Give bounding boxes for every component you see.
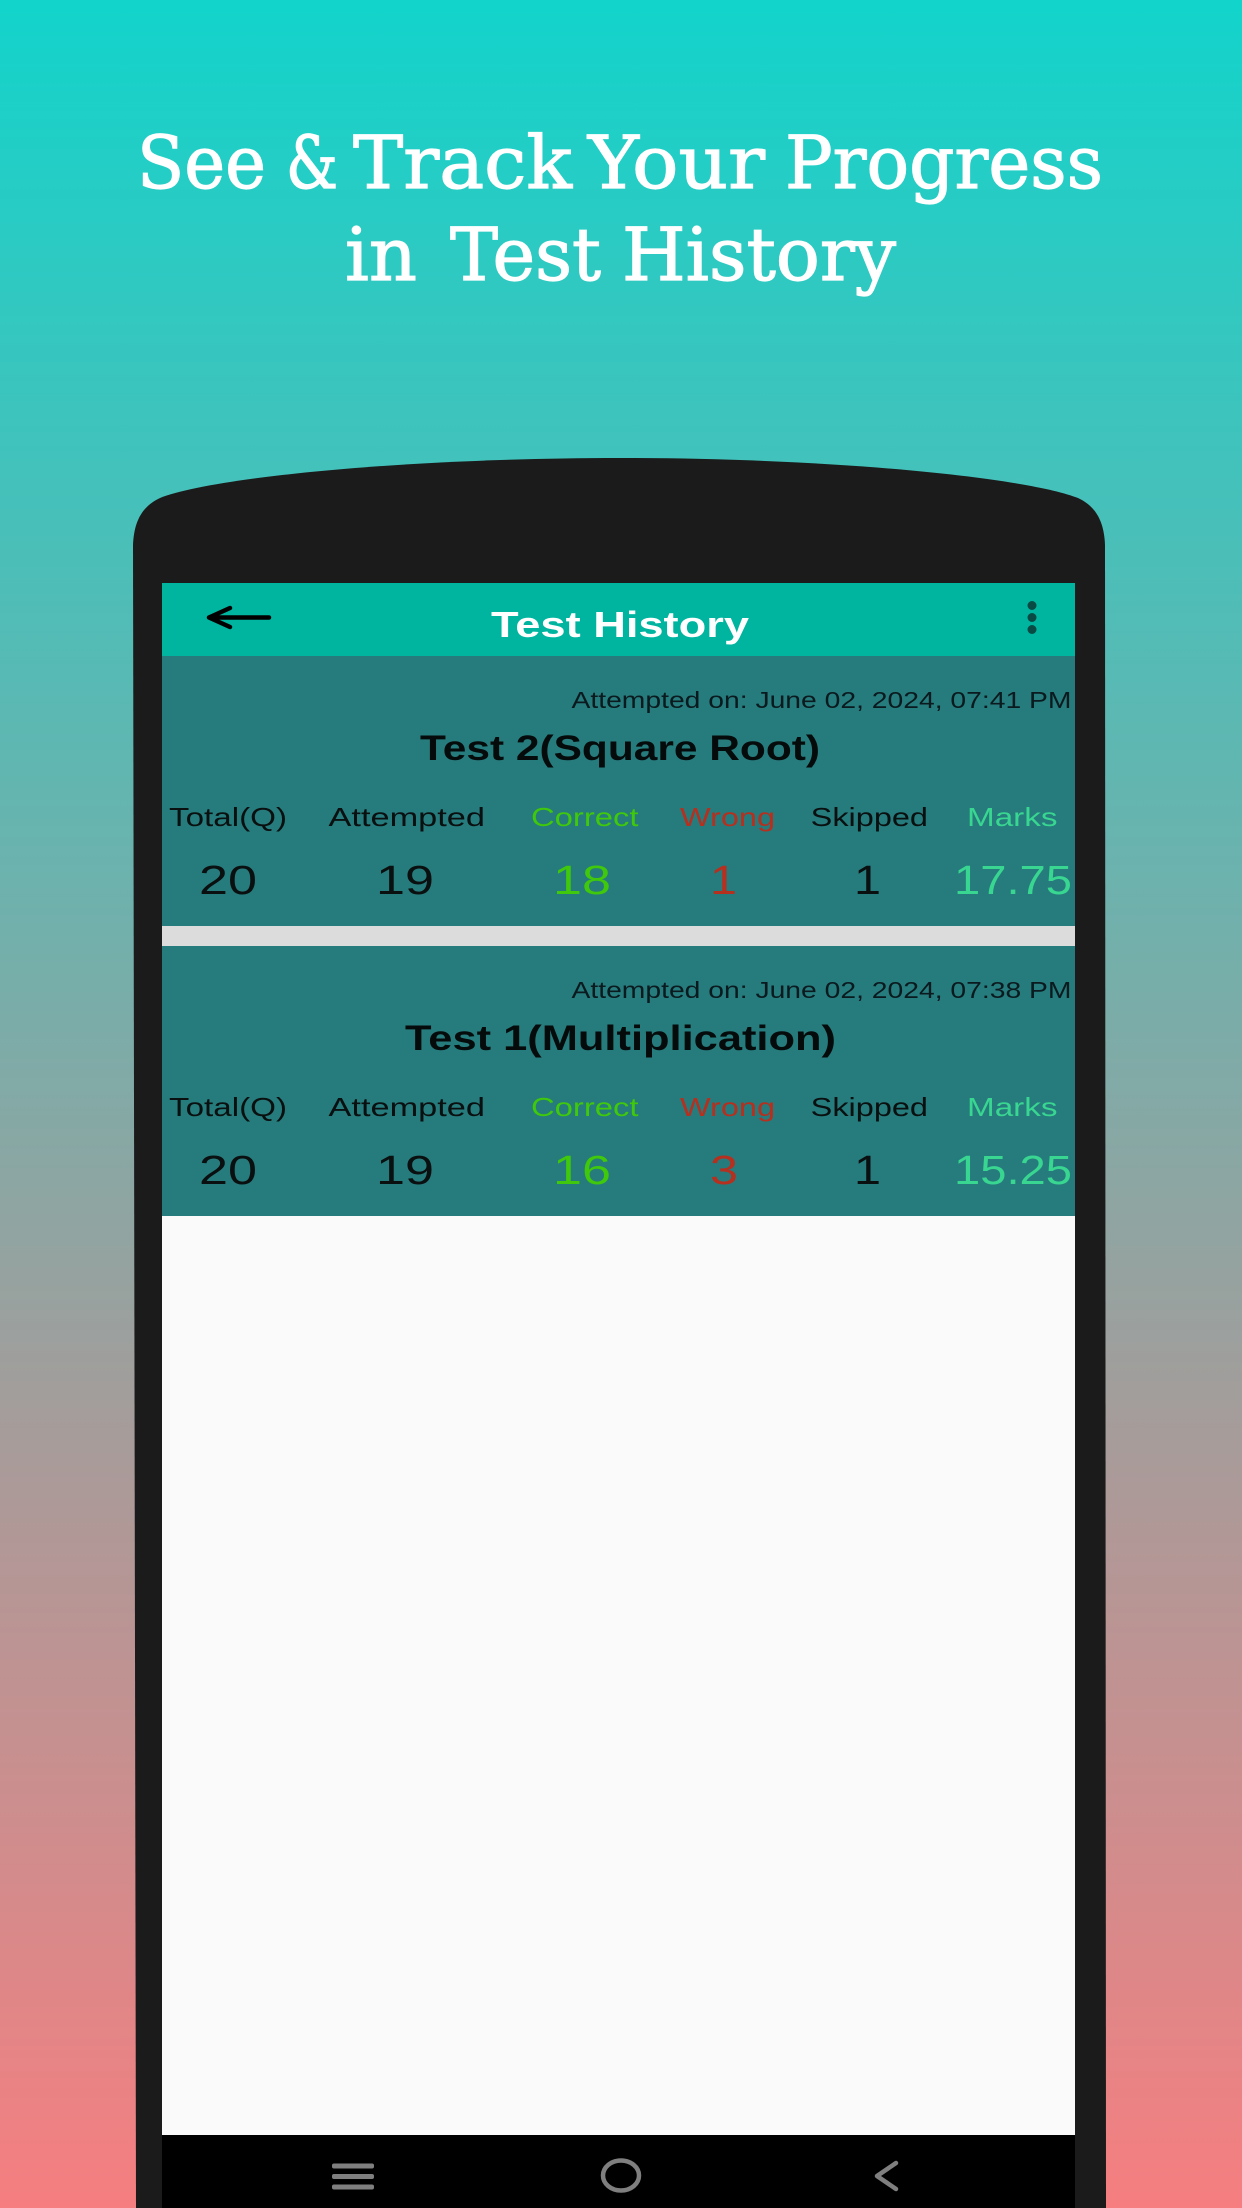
stat labels: Marks bbox=[967, 1092, 1058, 1122]
stat labels: Marks bbox=[967, 802, 1058, 832]
stat labels bbox=[169, 802, 1058, 832]
header title: Test History bbox=[491, 604, 749, 645]
attempted date: Attempted on: June 02, 2024, 07:38 PM bbox=[572, 977, 1072, 1003]
stat labels: Correct bbox=[531, 802, 639, 832]
icon: back arrow bbox=[209, 608, 269, 627]
stat values bbox=[199, 1147, 1072, 1193]
stat values: 17.75 bbox=[954, 857, 1072, 903]
title: History bbox=[622, 213, 897, 298]
stat values: 20 bbox=[199, 1147, 257, 1193]
panel: test 1 card bbox=[162, 946, 1075, 1216]
stat labels: Attempted bbox=[328, 802, 485, 832]
stat labels bbox=[169, 1092, 1058, 1122]
stat labels: Skipped bbox=[811, 1092, 928, 1122]
stat labels: Attempted bbox=[328, 1092, 485, 1122]
stat values: 1 bbox=[854, 1147, 881, 1193]
title: See bbox=[137, 121, 266, 206]
icon: back bbox=[877, 2163, 896, 2189]
stat values: 20 bbox=[199, 857, 257, 903]
stat labels: Skipped bbox=[811, 802, 928, 832]
stat labels: Correct bbox=[531, 1092, 639, 1122]
stat values bbox=[199, 857, 1072, 903]
title: Progress bbox=[785, 121, 1103, 206]
stat values: 16 bbox=[553, 1147, 611, 1193]
test name: Test 1(Multiplication) bbox=[405, 1019, 836, 1058]
screen background bbox=[162, 583, 1075, 2135]
stat labels: Total(Q) bbox=[169, 1092, 287, 1122]
stat labels: Total(Q) bbox=[169, 802, 287, 832]
app header bar bbox=[162, 583, 1075, 656]
title: Track bbox=[353, 121, 573, 206]
stat values: 1 bbox=[710, 857, 737, 903]
title: Test bbox=[450, 213, 601, 298]
stat values: 1 bbox=[854, 857, 881, 903]
stat values: 19 bbox=[376, 857, 434, 903]
title bbox=[137, 121, 1103, 298]
title: Your bbox=[587, 121, 765, 206]
card divider bbox=[162, 926, 1075, 946]
stat labels: Wrong bbox=[680, 802, 775, 832]
icon: overflow menu bbox=[1028, 601, 1036, 634]
icon: home bbox=[603, 2160, 639, 2190]
title: & bbox=[286, 121, 338, 206]
title: in bbox=[345, 213, 417, 298]
phone screen bbox=[162, 583, 1075, 2208]
stat values: 19 bbox=[376, 1147, 434, 1193]
stat values: 15.25 bbox=[954, 1147, 1072, 1193]
phone frame bbox=[133, 458, 1106, 2208]
panel: test 2 card bbox=[162, 656, 1075, 926]
navigation bar bbox=[162, 2135, 1075, 2208]
icon: menu bbox=[332, 2164, 374, 2190]
stat values: 18 bbox=[553, 857, 611, 903]
stat labels: Wrong bbox=[680, 1092, 775, 1122]
stat values: 3 bbox=[710, 1147, 738, 1193]
attempted date: Attempted on: June 02, 2024, 07:41 PM bbox=[572, 687, 1072, 713]
test name: Test 2(Square Root) bbox=[420, 729, 820, 768]
